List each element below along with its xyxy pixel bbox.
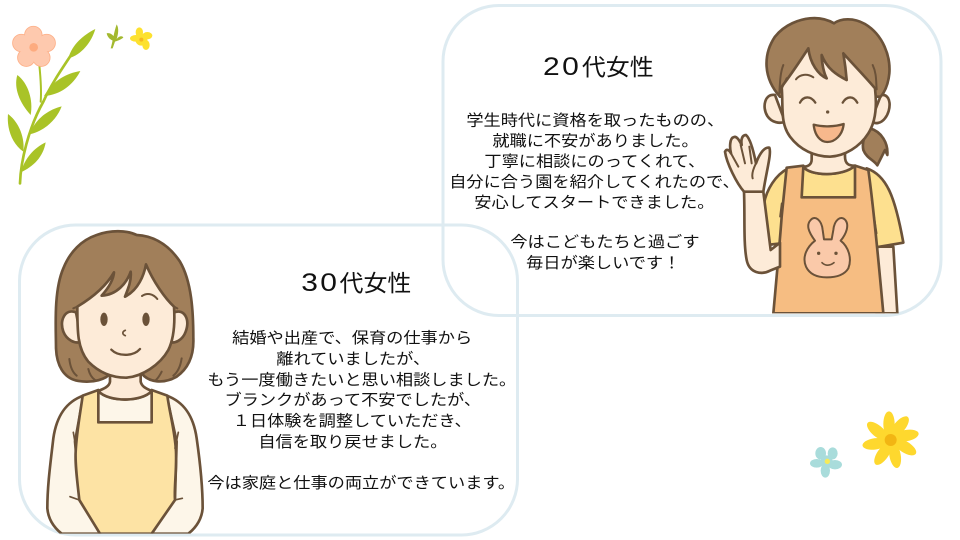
heading: 30s woman: [301, 268, 411, 296]
text block: 30s testimonial: もう一度働きたいと思い相談しました。: [207, 372, 516, 389]
icon: small green sprout: [107, 24, 123, 48]
illustration: smiling woman in yellow apron: [47, 231, 203, 534]
text block: 20s testimonial: 安心してスタートできました。: [474, 194, 714, 211]
icon: small yellow flower: [130, 27, 152, 50]
text block: 20s testimonial: 就職に不安がありました。: [492, 133, 699, 150]
illustration: smiling woman in orange apron: [725, 18, 903, 313]
text block: 20s testimonial: 毎日が楽しいです！: [526, 255, 680, 272]
text block: 30s testimonial: ブランクがあって不安でしたが、: [224, 391, 481, 409]
heading: 20s woman: 20: [543, 52, 581, 80]
heading: 20s woman: [543, 52, 654, 80]
text block: 20s testimonial: 学生時代に資格を取ったものの、: [466, 112, 724, 129]
heading: 30s woman: 30: [301, 268, 339, 296]
text block: 30s testimonial: 自信を取り戻せました。: [258, 434, 447, 451]
decoration: green sprig with pink flower: [8, 27, 95, 183]
icon: rabbit on apron: [804, 218, 850, 277]
text block: 20s testimonial: 丁寧に相談にのってくれて、: [484, 153, 705, 170]
icon: blue flower: [810, 447, 842, 478]
panel: 30s woman testimonial: [20, 225, 521, 535]
heading: 30s woman: 代女性: [340, 270, 411, 296]
text block: 30s testimonial: １日体験を調整していただき、: [233, 413, 472, 430]
text block: 20s testimonial: 自分に合う園を紹介してくれたので、: [449, 174, 740, 191]
icon: pink flower: [13, 27, 55, 66]
panel: 20s woman testimonial: [443, 6, 941, 316]
text block: 30s testimonial: 結婚や出産で、保育の仕事から: [232, 330, 472, 347]
text block: 30s testimonial: 離れていましたが、: [276, 351, 430, 368]
icon: yellow daisy: [862, 411, 920, 469]
text block: 30s testimonial: 今は家庭と仕事の両立ができています。: [207, 475, 515, 492]
heading: 20s woman: 代女性: [582, 54, 654, 80]
text block: 20s testimonial: 今はこどもたちと過ごす: [510, 234, 700, 251]
